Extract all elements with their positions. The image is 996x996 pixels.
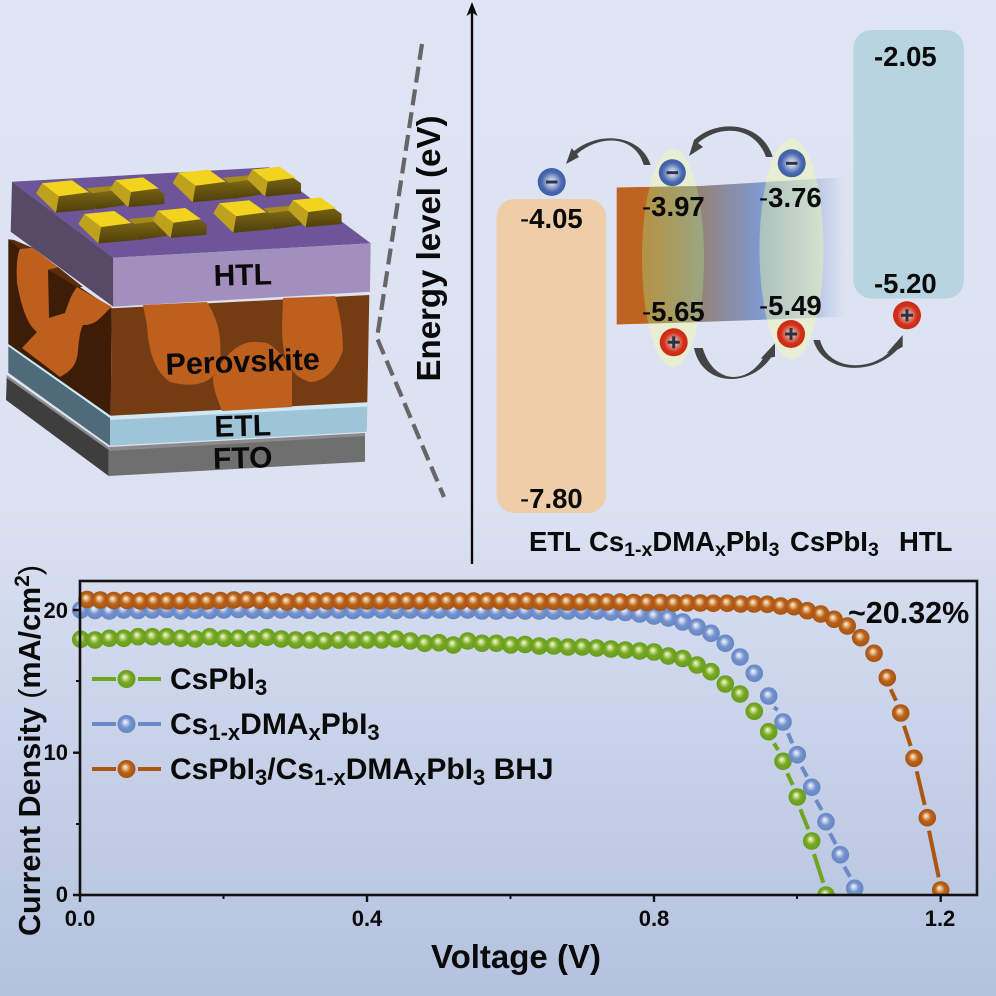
legend: Cs1-xDMAxPbI3: x [308, 720, 321, 745]
legend: Cs1-xDMAxPbI3: 1-x [208, 720, 241, 745]
legend: BHJ: /Cs [267, 753, 314, 786]
electrons [538, 149, 806, 196]
band labels [529, 526, 952, 561]
energy band: HTL [854, 30, 964, 299]
y axis title: 2 [11, 575, 34, 587]
hole transfer arrows [694, 335, 903, 379]
legend: BHJ: 1-x [314, 765, 347, 790]
energy axis arrow [466, 2, 478, 564]
legend [92, 663, 554, 790]
x tick labels [65, 906, 955, 931]
legend: BHJ [92, 753, 554, 790]
efficiency callout: ~20.32% [848, 596, 969, 630]
energy band: ETL: -4.05 [520, 203, 583, 234]
band labels: 1-x [624, 539, 652, 561]
energy band: HTL: -2.05 [874, 41, 937, 72]
device stack illustration [6, 167, 371, 476]
band labels: PbI [726, 526, 769, 557]
layer: FTO [6, 375, 365, 476]
x axis title: Voltage (V) [431, 938, 601, 975]
curve: CsPbI3 [72, 628, 835, 904]
curve: CsPbI3/Cs1-xDMAxPbI3 BHJ [78, 591, 949, 899]
band labels: 3 [868, 539, 879, 561]
y tick labels: 0 [56, 882, 68, 907]
legend: Cs1-xDMAxPbI3: DMA [240, 708, 308, 741]
legend: BHJ: CsPbI [170, 753, 255, 786]
layer: ETL [8, 344, 367, 446]
band labels: x [715, 539, 726, 561]
energy band: ETL: -7.80 [520, 483, 583, 514]
legend: CsPbI3 [92, 663, 267, 700]
x tick labels: 1.2 [925, 906, 955, 931]
band labels: ETL [529, 526, 581, 557]
electron transfer arrows [566, 126, 773, 165]
band labels: DMA [652, 526, 715, 557]
legend: Cs1-xDMAxPbI3: PbI [321, 708, 367, 741]
legend: BHJ: BHJ [485, 753, 554, 786]
x tick labels: 0.8 [639, 906, 669, 931]
band: perovskite gradient heterojunction: -5.49 [759, 290, 822, 321]
band labels: HTL [899, 526, 952, 557]
y axis title: Current Density (mA/cm [13, 587, 47, 936]
y tick labels [44, 598, 68, 907]
legend: BHJ: DMA [346, 753, 414, 786]
layer: Perovskite: Perovskite [165, 342, 320, 382]
layer: ETL: ETL [214, 409, 272, 444]
energy band: ETL [496, 199, 606, 514]
legend: Cs1-xDMAxPbI3 [92, 708, 380, 745]
layer: FTO: FTO [213, 441, 273, 476]
layer: HTL: HTL [213, 258, 272, 293]
y axis title: ) [13, 565, 47, 575]
energy axis title: Energy level (eV) [410, 116, 447, 381]
gold electrodes [36, 167, 342, 244]
dashed zoom connector [377, 44, 444, 497]
band: perovskite gradient heterojunction: -5.65 [642, 296, 705, 327]
band: perovskite gradient heterojunction: -3.76 [759, 182, 822, 213]
legend: BHJ: 3 [473, 765, 485, 790]
layer: HTL [11, 167, 371, 307]
y tick labels: 10 [44, 740, 68, 765]
holes [660, 301, 921, 356]
legend: Cs1-xDMAxPbI3: Cs [170, 708, 208, 741]
legend: CsPbI3: CsPbI [170, 663, 255, 696]
legend: CsPbI3: 3 [255, 675, 267, 700]
energy band: HTL: -5.20 [874, 268, 937, 299]
legend: Cs1-xDMAxPbI3: 3 [367, 720, 380, 745]
band labels: 3 [769, 539, 780, 561]
band labels: CsPbI [790, 526, 868, 557]
legend: BHJ: x [414, 765, 427, 790]
legend: BHJ: PbI [426, 753, 473, 786]
x tick labels: 0.0 [65, 906, 95, 931]
band: perovskite gradient heterojunction [617, 139, 845, 367]
band labels: Cs [589, 526, 624, 557]
y tick labels: 20 [44, 598, 68, 623]
x tick labels: 0.4 [352, 906, 383, 931]
layer: Perovskite [8, 239, 369, 416]
legend: BHJ: 3 [255, 765, 267, 790]
J-V chart [11, 565, 977, 975]
band: perovskite gradient heterojunction: -3.97 [642, 191, 705, 222]
curve: Cs1-xDMAxPbI3 [72, 601, 863, 897]
plot frame and ticks [73, 581, 977, 902]
